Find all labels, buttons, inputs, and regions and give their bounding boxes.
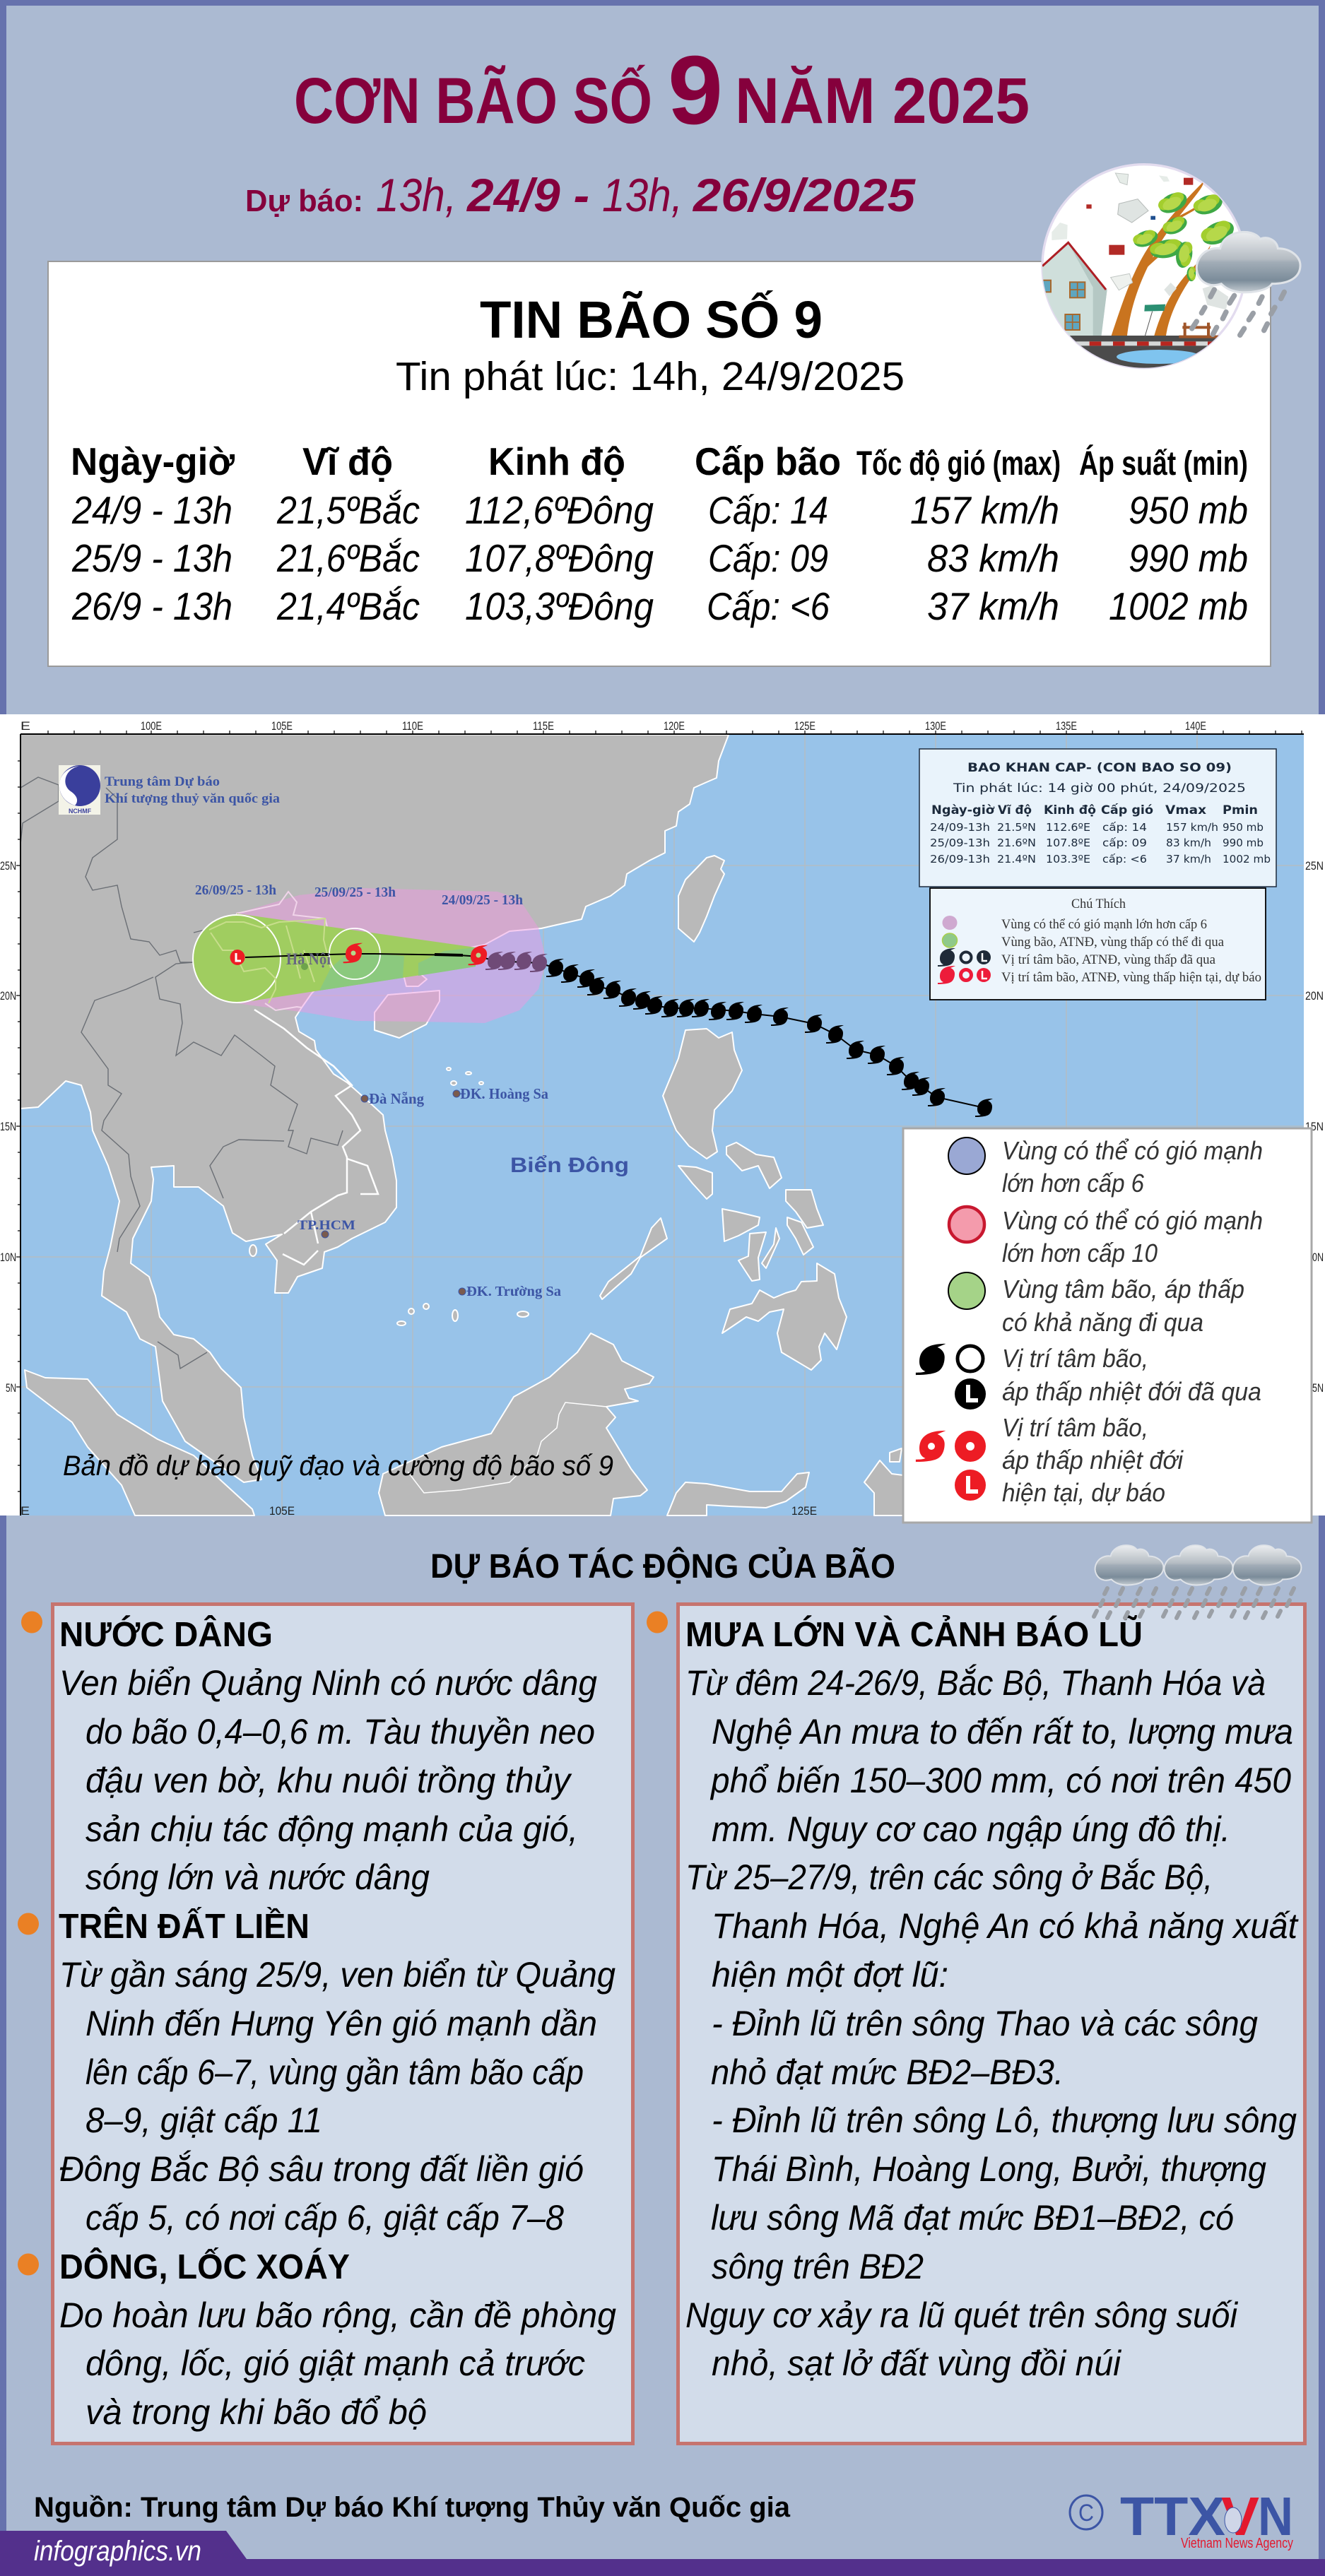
country borders (20, 777, 343, 1369)
axes: 100E (141, 719, 162, 733)
past positions at sea (546, 959, 993, 1117)
table row 25/9: 990 mb (1129, 536, 1248, 580)
block: heavy rain and flood warning: mm. Nguy cơ cao ngập úng đô thị. (712, 1809, 1230, 1849)
map caption: Bản đồ dự báo quỹ đạo và cường độ bão số 9 (63, 1451, 613, 1482)
panel: large legend (903, 1128, 1312, 1523)
forecast period subtitle: 13h, (602, 169, 683, 221)
panel: small map legend: Vị trí tâm bão, ATNĐ, vùng thấp hiện tại, dự báo (1001, 970, 1261, 985)
table header: Ngày-giờ (71, 439, 235, 483)
block: storm surge: đậu ven bờ, khu nuôi trồng thủy (86, 1761, 572, 1800)
table row 26/9: 103,3ºĐông (465, 584, 654, 628)
table header: Tốc độ gió (max) (856, 445, 1061, 483)
panel: emergency storm table on map: Ngày-giờ (931, 803, 995, 817)
forecast storm centre cone (193, 914, 476, 1003)
bulletin time: Tin phát lúc: 14h, 24/9/2025 (396, 354, 905, 399)
table row 24/9: 157 km/h (910, 488, 1059, 532)
table row 26/9 (71, 584, 1248, 628)
logo: national hydro-meteorological centre: NCHMF (69, 808, 91, 815)
block: heavy rain and flood warning: - Đỉnh lũ trên sông Lô, thượng lưu sông (712, 2101, 1297, 2140)
table row 24/9: 21,5ºBắc (276, 488, 420, 532)
icon part: road and puddle (1070, 336, 1218, 368)
block: on land: cấp 5, có nơi cấp 6, giật cấp 7–8 (86, 2198, 564, 2238)
title: CƠN BÃO SỐ (294, 64, 652, 137)
Northern Vietnam outline inside wind area (236, 892, 329, 1010)
panel: emergency storm table on map: Tin phát lúc: 14 giờ 00 phút, 24/09/2025 (953, 781, 1246, 796)
panel: emergency storm table on map: 950 mb (1223, 821, 1264, 834)
title (294, 36, 1030, 145)
axes: 105E (269, 1504, 295, 1518)
axes: E (20, 1504, 30, 1518)
icon part: leaves (1131, 189, 1237, 281)
place label: Truong Sa: ĐK. Trường Sa (466, 1284, 561, 1299)
forecast date labels: 25/09/25 - 13h (314, 885, 396, 900)
block: heavy rain and flood warning: phổ biến 150–300 mm, có nơi trên 450 (709, 1761, 1291, 1800)
panel: emergency storm table on map: 157 km/h (1166, 821, 1218, 834)
table row 24/9: 950 mb (1129, 488, 1248, 532)
table header: Vĩ độ (302, 439, 393, 483)
legend item: current and forecast positions (916, 1413, 1184, 1507)
panel: emergency storm table on map: Pmin (1223, 803, 1258, 817)
panel: emergency storm table on map: 21.5ºN (997, 821, 1036, 834)
table row 24/9: 112,6ºĐông (465, 488, 654, 532)
table row 26/9: 37 km/h (927, 584, 1059, 628)
panel: emergency storm table on map: 21.4ºN (997, 853, 1036, 865)
block: heavy rain and flood warning: Thanh Hóa, Nghệ An có khả năng xuất (712, 1906, 1299, 1946)
block: on land: 8–9, giật cấp 11 (86, 2101, 322, 2140)
panel: emergency storm table on map: 26/09-13h (930, 853, 990, 865)
panel: emergency storm table on map: Cấp gió (1101, 803, 1153, 817)
block: heavy rain and flood warning: Thái Bình, Hoàng Long, Bưởi, thượng (712, 2149, 1266, 2189)
logo: TTXVN: V (1221, 2486, 1259, 2547)
panel: small map legend: Chú Thích (1071, 897, 1126, 911)
land masses (20, 734, 903, 1516)
title: NĂM 2025 (735, 65, 1030, 137)
panel: emergency storm table on map: Kinh độ (1044, 803, 1096, 817)
bulletin heading: TIN BÃO SỐ 9 (480, 290, 823, 349)
table row 26/9: 1002 mb (1109, 584, 1248, 628)
table row 26/9: 26/9 - 13h (71, 584, 232, 628)
panel: emergency storm table on map: 25/09-13h (930, 837, 990, 849)
logo: national hydro-meteorological centre (59, 765, 281, 815)
panel: emergency storm table on map: 1002 mb (1223, 853, 1271, 865)
block: thunderstorms and tornadoes (59, 2247, 616, 2432)
block: heavy rain and flood warning: Từ 25–27/9, trên các sông ở Bắc Bộ, (685, 1857, 1213, 1897)
table header (71, 439, 1248, 483)
block: heavy rain and flood warning: nhỏ đạt mức BĐ2–BĐ3. (711, 2052, 1064, 2092)
legend item: current and forecast positions: Vị trí tâm bão, (1002, 1413, 1148, 1442)
logo: TTXVN: C (1078, 2500, 1094, 2527)
table row 24/9: 24/9 - 13h (71, 488, 232, 532)
legend item: storm centre area: Vùng tâm bão, áp thấp (1002, 1275, 1244, 1304)
axes: 25N (0, 859, 16, 873)
legend item: past positions: áp thấp nhiệt đới đã qua (1002, 1377, 1261, 1406)
axes: E (20, 719, 30, 733)
block: thunderstorms and tornadoes: và trong khi bão đổ bộ (86, 2392, 427, 2432)
axes: 135E (1056, 719, 1077, 733)
section heading: DỰ BÁO TÁC ĐỘNG CỦA BÃO (430, 1547, 895, 1585)
block: heavy rain and flood warning: Từ đêm 24-26/9, Bắc Bộ, Thanh Hóa và (685, 1663, 1266, 1703)
legend item: wind above level 10: lớn hơn cấp 10 (1002, 1239, 1158, 1268)
block: thunderstorms and tornadoes: dông, lốc, gió giật mạnh cả trước (86, 2344, 585, 2383)
block: on land: lên cấp 6–7, vùng gần tâm bão cấp (86, 2052, 584, 2092)
forecast period subtitle: 26/9/2025 (692, 169, 916, 221)
panel: emergency storm table on map: 21.6ºN (997, 837, 1036, 849)
panel: emergency storm table on map: 37 km/h (1166, 853, 1211, 865)
panel: emergency storm table on map: Vmax (1165, 803, 1206, 817)
forecast period subtitle (245, 169, 916, 221)
table row 25/9: Cấp: 09 (708, 536, 828, 580)
block: on land: Từ gần sáng 25/9, ven biển từ Quảng (59, 1955, 616, 1995)
axes: 115E (533, 719, 554, 733)
block: thunderstorms and tornadoes: Do hoàn lưu bão rộng, cần đề phòng (59, 2296, 616, 2335)
block: on land: Ninh đến Hưng Yên gió mạnh dần (86, 2004, 597, 2043)
legend item: storm centre area (948, 1272, 1244, 1337)
past storm track (245, 952, 993, 1117)
panel: emergency storm table on map: 24/09-13h (930, 821, 990, 834)
panel: storm bulletin (48, 261, 1271, 666)
current and forecast positions (230, 943, 488, 965)
logo: TTXVN: Vietnam News Agency (1181, 2536, 1293, 2551)
table row 25/9: 107,8ºĐông (465, 536, 654, 580)
legend item: wind above level 10: Vùng có thể có gió mạnh (1002, 1206, 1263, 1235)
block: heavy rain and flood warning: lưu sông Mã đạt mức BĐ1–BĐ2, có (711, 2198, 1234, 2238)
axes: 105E (271, 719, 293, 733)
block: heavy rain and flood warning: - Đỉnh lũ trên sông Thao và các sông (712, 2004, 1258, 2043)
axes: 5N (6, 1381, 16, 1395)
logo: TTXVN: N (1258, 2486, 1293, 2547)
axes: 10N (0, 1251, 16, 1264)
table row 25/9: 21,6ºBắc (276, 536, 420, 580)
panel: small map legend: Vùng bão, ATNĐ, vùng thấp có thể đi qua (1001, 935, 1225, 950)
footer band (0, 2531, 1325, 2576)
Borneo internal border (408, 1402, 606, 1493)
legend item: wind above level 6 (948, 1136, 1263, 1198)
axes: 125E (794, 719, 815, 733)
table row 25/9: 25/9 - 13h (71, 536, 232, 580)
axes: 140E (1185, 719, 1206, 733)
icon part: trees (1112, 182, 1211, 336)
bullet (18, 1913, 39, 1934)
block: heavy rain and flood warning (685, 1615, 1299, 2383)
bullet (21, 1611, 42, 1633)
bullet (647, 1611, 668, 1633)
logo: TTXVN (1070, 2486, 1293, 2551)
table row 24/9: Cấp: 14 (708, 488, 828, 532)
block: heavy rain and flood warning: sông trên BĐ2 (712, 2247, 924, 2286)
place label: Hanoi: Hà Nội (286, 950, 331, 968)
past positions within wind area (485, 952, 548, 972)
block: heavy rain and flood warning: nhỏ, sạt lở đất vùng đồi núi (712, 2344, 1122, 2383)
panel: emergency storm table on map: 107.8ºE (1046, 837, 1090, 849)
logo: TTXVN: TTX (1120, 2486, 1225, 2547)
axes: 125E (791, 1504, 817, 1518)
table header: Kinh độ (488, 439, 625, 483)
legend item: wind above level 10 (949, 1206, 1263, 1268)
panel: emergency storm table on map: 112.6ºE (1046, 821, 1090, 834)
panel: emergency storm table on map: 990 mb (1223, 837, 1264, 849)
panel: emergency storm table on map: BAO KHAN CAP- (CON BAO SO 09) (967, 761, 1232, 775)
place label: Da Nang: Đà Nẵng (369, 1090, 424, 1107)
title: 9 (668, 36, 723, 145)
table header: Cấp bão (695, 439, 841, 483)
bullet (18, 2254, 39, 2275)
icon: storm illustration (1042, 165, 1300, 378)
forecast period subtitle: 13h, (376, 169, 457, 221)
footer site name: infographics.vn (34, 2536, 201, 2567)
place label: East Sea: Biển Đông (510, 1154, 629, 1177)
sea (20, 734, 1304, 1516)
block: on land (59, 1907, 616, 2238)
panel: emergency storm table on map: Vĩ độ (998, 803, 1032, 817)
panel: small map legend: Vị trí tâm bão, ATNĐ, vùng thấp đã qua (1001, 952, 1216, 967)
axes: 120E (664, 719, 685, 733)
legend item: storm centre area: có khả năng đi qua (1002, 1308, 1203, 1337)
block: storm surge (59, 1615, 597, 1897)
block: thunderstorms and tornadoes: DÔNG, LỐC XOÁY (59, 2247, 350, 2286)
panel: emergency storm table on map: cấp: 09 (1102, 837, 1147, 849)
table row 25/9 (71, 536, 1248, 580)
panel: small map legend (930, 888, 1266, 1000)
icon part: house (1042, 242, 1107, 337)
panel: emergency storm table on map: 103.3ºE (1046, 853, 1090, 865)
legend item: wind above level 6: Vùng có thể có gió mạnh (1002, 1136, 1263, 1165)
axes: 20N (0, 989, 16, 1003)
forecast period subtitle: 24/9 - (466, 169, 589, 221)
forecast date labels: 26/09/25 - 13h (195, 882, 276, 898)
panel: small map legend: Vùng có thể có gió mạnh lớn hơn cấp 6 (1001, 917, 1207, 932)
place label: Ho Chi Minh City (298, 1218, 355, 1238)
icon: rain clouds (1094, 1545, 1301, 1618)
source line: Nguồn: Trung tâm Dự báo Khí tượng Thủy văn Quốc gia (34, 2492, 791, 2523)
panel: emergency storm table on map: cấp: 14 (1102, 821, 1147, 834)
forecast date labels (195, 882, 523, 908)
panel: emergency storm table on map (919, 749, 1276, 887)
legend item: current and forecast positions: áp thấp nhiệt đới (1002, 1446, 1184, 1475)
icon part: flying debris (1052, 173, 1228, 338)
place label: Ho Chi Minh City: TP.HCM (298, 1218, 355, 1233)
map (0, 714, 1325, 1518)
axes: 15N (0, 1120, 16, 1133)
panel: emergency storm table on map: cấp: <6 (1102, 853, 1147, 865)
block: heavy rain and flood warning: hiện một đợt lũ: (712, 1955, 948, 1995)
block: storm surge: do bão 0,4–0,6 m. Tàu thuyền neo (86, 1712, 595, 1751)
legend item: wind above level 6: lớn hơn cấp 6 (1002, 1169, 1145, 1198)
Vietnam outline (254, 1010, 378, 1265)
forecast period subtitle: Dự báo: (245, 184, 363, 218)
map frame white margin (0, 714, 1325, 1516)
legend item: past positions: Vị trí tâm bão, (1002, 1344, 1148, 1373)
forecast date labels: 24/09/25 - 13h (442, 892, 523, 908)
panel: right impacts (647, 1604, 1305, 2443)
icon part: cloud (1196, 232, 1300, 293)
panel: left impacts (18, 1604, 633, 2443)
legend item: current and forecast positions: hiện tại, dự báo (1002, 1478, 1165, 1507)
table row 26/9: Cấp: <6 (707, 584, 830, 628)
table row 26/9: 21,4ºBắc (276, 584, 420, 628)
block: storm surge: sóng lớn và nước dâng (86, 1857, 430, 1897)
block: heavy rain and flood warning: MƯA LỚN VÀ CẢNH BÁO LŨ (685, 1615, 1143, 1654)
axes: 130E (925, 719, 946, 733)
logo: national hydro-meteorological centre: Khí tượng thuỷ văn quốc gia (105, 791, 281, 806)
block: storm surge: NƯỚC DÂNG (59, 1615, 273, 1654)
place label: Hoang Sa: ĐK. Hoàng Sa (460, 1085, 548, 1102)
logo: national hydro-meteorological centre: Trung tâm Dự báo (105, 774, 220, 789)
legend item: past positions (916, 1344, 1261, 1410)
axes (0, 719, 1324, 1518)
icon part: rain (1192, 290, 1284, 335)
block: heavy rain and flood warning: Nguy cơ xảy ra lũ quét trên sông suối (685, 2296, 1239, 2335)
panel: emergency storm table on map: 83 km/h (1166, 837, 1211, 849)
table row 25/9: 83 km/h (927, 536, 1059, 580)
block: storm surge: Ven biển Quảng Ninh có nước dâng (59, 1663, 597, 1703)
table header: Áp suất (min) (1079, 444, 1248, 483)
block: on land: Đông Bắc Bộ sâu trong đất liền gió (59, 2149, 584, 2189)
block: storm surge: sản chịu tác động mạnh của gió, (86, 1809, 578, 1849)
axes: 110E (402, 719, 423, 733)
block: on land: TRÊN ĐẤT LIỀN (59, 1907, 310, 1946)
block: heavy rain and flood warning: Nghệ An mưa to đến rất to, lượng mưa (712, 1712, 1293, 1751)
wind area: stronger than level 6 (236, 888, 546, 1023)
table row 24/9 (71, 488, 1248, 532)
